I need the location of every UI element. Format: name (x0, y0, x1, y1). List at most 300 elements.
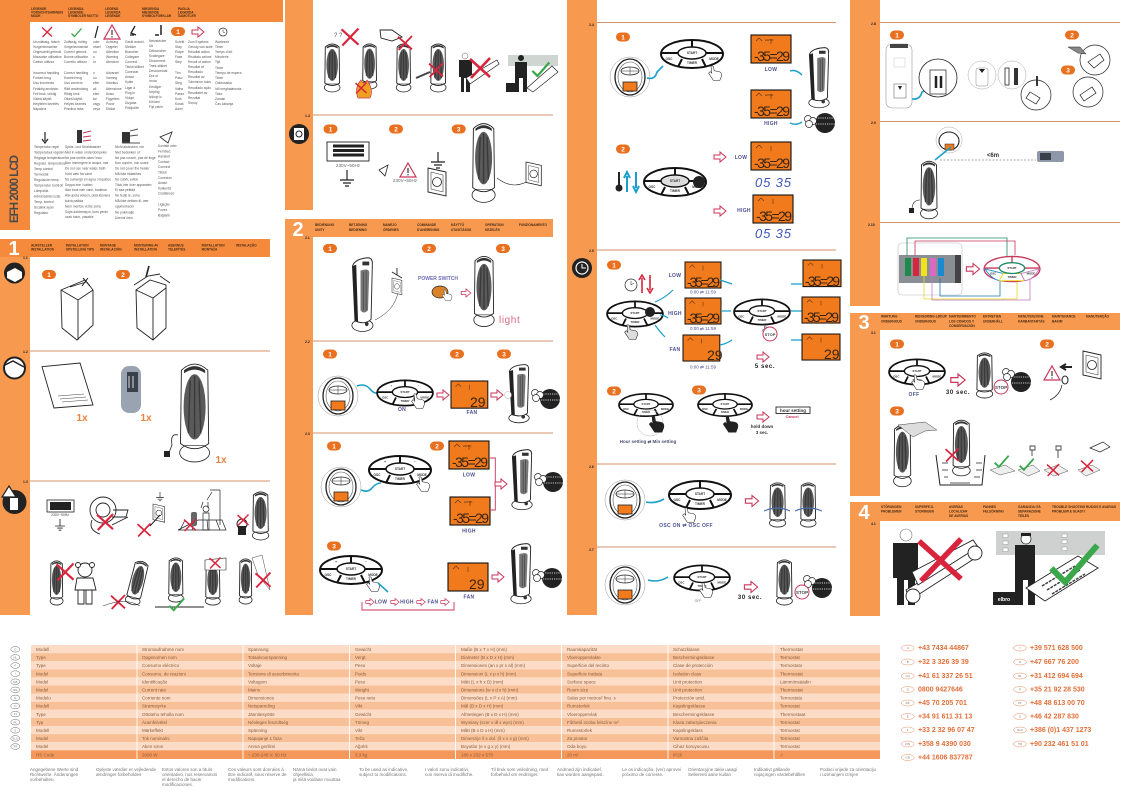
section 2 header: D'ANDRENING (417, 228, 440, 232)
legend text columns: Resultado ação (188, 86, 211, 90)
warnings row 2 (50, 555, 270, 610)
section 4 header: FELSÖKNING (983, 508, 1004, 514)
step 2.5 timer: FAN (670, 347, 681, 353)
safety texts: Réglage température (34, 156, 65, 160)
legend column headings: MIEGENDA (142, 7, 160, 11)
legend text columns: Riktig bruk (64, 92, 80, 96)
footnotes: orientativo, nos reservamos (162, 772, 218, 777)
step 2.5 hour and minute setting: OSC (702, 407, 708, 411)
contents: manual, remote, heater (42, 363, 227, 466)
safety texts: Fernbed. (158, 149, 171, 153)
section 3 header: RENGØRING-LØDUP (915, 314, 948, 318)
section 3 header: KARBANTARTÁS (1018, 318, 1044, 324)
legend text columns: Adım (175, 107, 183, 111)
section 4 header: PROBLEMI E GUASTI (1052, 510, 1085, 514)
section 1 header: OPSTELLING TIPS (66, 248, 94, 252)
step 2.10 button colours: START (1007, 266, 1017, 270)
legend text columns: Gerät anschl. (125, 40, 145, 44)
service phone numbers: +31 412 694 694 (1030, 673, 1083, 680)
country badges: D (14, 647, 17, 651)
legend column headings: LEGENDE (68, 10, 83, 14)
legend text columns: ou (93, 76, 97, 80)
service phone numbers: +41 61 337 26 51 (918, 673, 973, 680)
section 1 header: INSTALLATION (31, 248, 55, 252)
footnotes: modifications. (228, 777, 256, 782)
safety texts: Temperatur regel (34, 145, 59, 149)
step 2.4 adjust (616, 142, 793, 241)
specification table: Strømstyrke (142, 704, 167, 709)
specification table: Spänning (248, 728, 268, 733)
specification table: IP20 (673, 752, 683, 757)
step 2.5 hour and minute setting: MODE (661, 407, 670, 411)
legend text columns (33, 39, 242, 111)
step 2.3 mode cycling: TIMER (346, 577, 357, 581)
specification table: Thermostat (780, 688, 804, 692)
panel: col 3 operation: 2.6 (589, 465, 594, 469)
legend text columns: Conectar (125, 70, 139, 74)
specification table: Stromaufnahme nom (142, 647, 184, 652)
legend text columns: Figyelem (106, 97, 120, 101)
country badges: FI (14, 712, 17, 716)
step 2.5 timer: 1 (612, 262, 616, 270)
legend text columns: Minuterie (215, 55, 229, 59)
legend text columns: ou (93, 50, 97, 54)
step 2.2 fan: + (391, 384, 393, 388)
specification table: Poids (355, 671, 367, 676)
step 2.2 fan: START (400, 390, 410, 394)
panel: col 3 operation: 2.5 (589, 249, 594, 253)
warnings row 3: ? ? (334, 33, 343, 39)
step 2.10 button colours (898, 238, 1040, 300)
specification table: Tensione di assorbimento (248, 671, 300, 676)
specification table: Vloeroppervlakte (567, 655, 601, 660)
step 2.2 fan: 3 (502, 352, 506, 358)
safety texts: Suya daldırmayın, kuru yerde (65, 210, 108, 214)
service phone numbers: A (907, 646, 909, 650)
section 2 header (285, 219, 553, 241)
section 1 header: INSTALLATION (202, 244, 225, 248)
step 2.5 timer: START (630, 311, 640, 315)
legend text columns: Priključite (125, 106, 139, 110)
specification table: ✓ (780, 752, 784, 757)
step 2.3 heat: + (384, 460, 386, 464)
legend text columns: ali (93, 87, 97, 91)
specification table: Ottoteho teholla nom (142, 712, 184, 717)
legend text columns: Unzulässig, falsch (33, 40, 60, 44)
specification table: Isolation class (673, 671, 702, 676)
specification table: Current rate (142, 688, 167, 692)
safety texts: Ne fedje le, soha (115, 194, 140, 198)
specification table: Kapslingsklasse (673, 704, 706, 709)
legend text columns: Wartezeit (215, 40, 229, 44)
panel: legend (0, 0, 283, 230)
step 2.5 timer: START (757, 309, 767, 313)
section 3 header: LOS CIDADOS Y (949, 320, 975, 324)
step 2.5 timer: OSC (738, 314, 744, 318)
legend text columns: Gevolg van actie (188, 45, 213, 49)
safety texts: oppmerksom (115, 204, 134, 208)
service phone numbers: +39 571 628 500 (1030, 645, 1083, 652)
legend column headings: LEGENDA (68, 7, 84, 11)
specification table: Netspænding (248, 704, 275, 709)
step 2.8 batteries: 1 (895, 32, 899, 40)
specification table: Salas por metros² fino. s (567, 696, 617, 701)
legend text columns: veya (93, 107, 100, 111)
legend text columns: Rezultat (188, 96, 200, 100)
footnotes: vorbehalten. (30, 777, 55, 782)
legend text columns: Väärä käyttö (33, 97, 52, 101)
service phone numbers: +44 1606 837787 (918, 754, 973, 762)
safety symbols (42, 129, 172, 143)
safety texts: Temperatuur regelen (34, 150, 65, 154)
step 2.3 heat: − (414, 460, 416, 464)
step 2.3 mode cycling: MODE (368, 573, 378, 577)
legend text columns: Scollegare (149, 54, 165, 58)
legend text columns: Kytke (125, 80, 133, 84)
service phone numbers: +35 21 92 28 530 (1030, 686, 1085, 694)
safety texts: Regulación temp. (34, 178, 60, 182)
legend text columns: oder (93, 40, 100, 44)
legend text columns: Passo (175, 92, 184, 96)
legend text columns: Korrekt brug (64, 76, 82, 80)
section 2 header: FUNZIONAMENTO (519, 223, 547, 227)
step 2.5 hour and minute setting: START (641, 402, 651, 406)
service phone numbers: +45 70 205 701 (918, 700, 967, 707)
panel: section 3 cleaning: 3.1 (871, 331, 876, 335)
step 2.2 fan: − (418, 384, 420, 388)
country badges: SLO (12, 736, 19, 740)
panel: section 1 installation (0, 256, 270, 615)
step 2.4 temperature: TIMER (687, 61, 698, 65)
section 4 header: TEILES (1018, 514, 1029, 518)
step 2.2 fan: 1 (328, 352, 332, 358)
service phone numbers: NL (1018, 674, 1022, 678)
legend text columns: Dugása (125, 101, 137, 105)
section 1 header: MONTERING AV (134, 244, 159, 248)
specification table: Vergt (355, 655, 366, 660)
step 2.2 fan: ON (398, 407, 406, 413)
specification table: Kapslingsklass (673, 728, 704, 733)
legend text columns: Feil bruk, uriktig (33, 92, 56, 96)
specification table: Type (36, 712, 46, 717)
country badges: IRL (13, 688, 18, 692)
legend text columns: Tidur (215, 92, 223, 96)
footnotes: To be used as indicative, (359, 767, 408, 772)
legend text columns: Tilslut stikket (125, 65, 144, 69)
step 2.2 fan: 29 (470, 394, 486, 410)
legend text columns: Collegare (125, 55, 139, 59)
section 3 header: BAKIM (1052, 320, 1063, 324)
specification table: Modell (36, 704, 49, 709)
legend text columns: Vaihe (175, 87, 183, 91)
step 2.6 oscillation: OSC (674, 498, 681, 502)
step 2.5 hour and minute setting: START (720, 402, 730, 406)
step 2.6 oscillation: MODE (717, 498, 727, 502)
specification table: Termostat (780, 655, 801, 660)
footnotes: kan worden aangepast. (557, 772, 604, 777)
footnotes: Andmed zijn indicatief, (557, 767, 602, 772)
legend column headings: LEGENDA (105, 10, 121, 14)
legend text columns: Fase (175, 55, 182, 59)
specification table: Model (36, 679, 48, 684)
legend text columns: Kihúzni (149, 100, 160, 104)
section 4 header: RUIDOS E AVARIAS (1086, 505, 1116, 509)
legend text columns: Tiempo de espera (215, 71, 242, 75)
service phone numbers: D (907, 688, 910, 692)
safety texts: Anslut (158, 181, 167, 185)
legend text columns: Résultat action (188, 50, 210, 54)
step 2.4 temperature: OSC (666, 57, 673, 61)
specification table: Beschermingsklasse (673, 712, 715, 717)
country badges: N (14, 704, 16, 708)
legend text columns: Cattivo utilizzo (33, 60, 54, 64)
specification table: Weight (355, 688, 370, 692)
step 2.4 temperature (610, 32, 835, 133)
legend text columns: Etape (175, 50, 184, 54)
legend text columns: eller (93, 92, 100, 96)
step 2.4 adjust: 2 (621, 146, 625, 154)
specification table: Type (36, 663, 46, 668)
legend text columns: Toiminnon tulos (188, 80, 211, 84)
step 2.4 temperature: 1 (621, 34, 625, 42)
section 1 header: MONTAŽA (202, 246, 218, 252)
step 2.5 timer (607, 260, 841, 370)
legend text columns: Timer (215, 76, 224, 80)
section 3 header: MANUTENZIONE (1018, 314, 1044, 318)
warnings row 1 (47, 490, 269, 540)
section 2 header: MANEJO (383, 223, 397, 227)
step 2.4 temperature: -35=29 (754, 103, 790, 119)
step 2.6 oscillation (605, 480, 822, 529)
legend text columns: tai (93, 97, 97, 101)
footnotes: Orientacyjne takie uwagi (688, 767, 737, 772)
step 2.5 hour and minute setting: 3 (697, 388, 701, 394)
legend text columns: Paso (175, 76, 183, 80)
section 2 header: COMMANDE (417, 223, 436, 227)
safety texts: Ei saa peittää (115, 188, 135, 192)
specification table: Boyutlar (e x g x y) (mm) (461, 744, 511, 749)
specification table: Model (36, 688, 48, 692)
section 4 header: GARANZIA ITÁ (1018, 504, 1041, 509)
specification table: Oda boyu (567, 744, 587, 749)
step 2.4 adjust: OSC (649, 185, 656, 189)
step 3.1 switch off: OFF (909, 392, 919, 398)
step 2.3 heat: MODE (417, 473, 427, 477)
step 2.5 timer: STOP (765, 332, 776, 337)
service phone numbers: S (1019, 714, 1021, 718)
safety texts: Doppa inte i vatten (65, 183, 93, 187)
panel: section 1 installation: 1.2 (23, 350, 28, 354)
step 2.3 mode cycling: FAN (428, 600, 439, 606)
step 2.5 timer: -35=29 (804, 309, 839, 325)
step 2.3 mode cycling: 29 (469, 576, 485, 592)
section 3 header: WARTUNG (881, 314, 898, 318)
legend text columns: Mauvaise utilisation (33, 55, 62, 59)
section 1 header: INSTALACIÓN (100, 246, 122, 252)
safety texts: Tilslut (158, 170, 167, 174)
step 2.4 adjust: 05 35 (755, 175, 792, 190)
footnotes: Podaci vrijede za orientaciju (820, 767, 876, 772)
step 3.1 cleaning (890, 406, 1110, 487)
section 4 header (850, 502, 1120, 524)
step 2.6 oscillation: OSC ON ⇄ OSC OFF (659, 522, 713, 529)
step 2.5 timer: 29 (824, 346, 840, 362)
specification table: Peso neto (355, 696, 376, 701)
service phone numbers: F (907, 728, 909, 732)
legend text columns: Uso incorrecto (33, 81, 54, 85)
specification table: Lämmönsäädin (780, 679, 811, 684)
step 2.3 mode cycling: + (335, 560, 337, 564)
section 2 header: KÄYTTÖ (451, 222, 465, 227)
legend text columns: Dikkat (106, 107, 115, 111)
warnings row 1: 230V~50Hz (51, 513, 69, 517)
footnotes: Til bruk som veiledning, med (491, 767, 548, 772)
step 3.1 switch off: 30 sec. (946, 390, 970, 396)
legend column headings: LEGENDA (178, 10, 194, 14)
specification table: Thermostat (780, 647, 803, 652)
legend text columns: Resultat af (188, 65, 204, 69)
legend text columns: Krok (175, 97, 182, 101)
footnotes: Le os indicação, (ver) aprovei (622, 767, 681, 772)
legend text columns: Resultat av (188, 75, 205, 79)
specification table: Type (36, 655, 46, 660)
step 2.4 temperature: START (687, 51, 697, 55)
section 3 header: MANTENIMIENTO (949, 314, 976, 318)
safety texts: Conexión (158, 176, 172, 180)
specification table: Dimensiones (248, 696, 275, 701)
legend text columns: Helyes kezelés (64, 102, 87, 106)
panel: col 4 remote control: 2.9 (871, 121, 876, 125)
service phone numbers: B (907, 660, 909, 664)
section 2 header: KEZELÉS (485, 227, 500, 232)
section 3 header: 3 (858, 312, 870, 334)
specification table: Gewicht (355, 647, 371, 652)
specification table: Termostat (780, 704, 801, 709)
service phone numbers: +47 667 76 200 (1030, 659, 1079, 666)
section 3 header: ONDERHOUD (881, 320, 903, 324)
specification table: Vikt (355, 704, 363, 709)
step 2.7 off: 30 sec. (738, 595, 762, 601)
step 2.5 timer: 0:00 ⇄ 11:59 (690, 364, 716, 370)
legend text columns: Tijd (215, 60, 220, 64)
specification table: Termostat (780, 720, 801, 725)
specification table: Napajanje 1 faza (248, 736, 282, 741)
legend column headings (31, 7, 197, 18)
specification table: Dimensiones (an x pr x al) (mm) (461, 663, 526, 668)
service phone numbers (901, 645, 1091, 762)
country badges: GB (13, 680, 17, 684)
step 2.10 button colours: OSC (990, 271, 996, 275)
specification table: Mått (L x h x D) (mm) (461, 678, 504, 684)
legend column headings: MIEGENDE (142, 10, 159, 14)
icon: clock (572, 258, 592, 278)
step 2.5 timer: MODE (777, 314, 786, 318)
legend text columns: Stekker (125, 45, 137, 49)
section 3 header: ONDERHOUD (915, 320, 937, 324)
specification table: Tok nominalni (142, 736, 170, 741)
specification table: Áramfelvétel (142, 719, 167, 725)
step 2.1 power on: 3 (501, 246, 505, 253)
specification table: Cihaz koruyucusu (673, 744, 709, 749)
step 2.10 button colours: TIMER (1008, 275, 1017, 279)
legend icon row: 1 (176, 29, 180, 36)
service phone numbers: 0800 9427646 (918, 686, 963, 694)
step 2.5 hour and minute setting: TIMER (721, 410, 729, 414)
step 3.1 switch off: 1 (895, 342, 899, 348)
section 4 header: TROUBLE SHOOTING (1052, 505, 1086, 509)
legend text columns: Vorgehensweise (33, 45, 57, 49)
step 2.7 off: MODE (717, 580, 726, 584)
safety texts: Aansluit (158, 155, 170, 159)
step 2.4 temperature: HIGH (764, 121, 778, 127)
legend column headings: SAMOTLER (178, 14, 197, 18)
step 2.3 mode cycling: FAN (464, 594, 475, 600)
specification table: Spannung (248, 647, 269, 652)
safety texts: Må ikke tildækkes (115, 172, 142, 176)
panel: section 3 cleaning (850, 330, 1110, 496)
panel: section 2 operation: 2.1 (305, 236, 310, 240)
safety texts: Ne pas mettre dans l'eau (65, 156, 102, 160)
legend text columns: Helytelen kezelés (33, 102, 59, 106)
service phone numbers: E (907, 714, 909, 718)
panel: col 4 remote control (850, 0, 1120, 306)
specification table: Peso (355, 663, 366, 668)
step 1 and 2 unpacking: 2 (121, 272, 125, 279)
panel: col 3 operation: 2.4 (589, 23, 594, 27)
footnotes: i uzimanjem izmjen (820, 772, 859, 777)
step 3.1 unplug (1040, 340, 1101, 400)
step 3.1 switch off: STOP (995, 385, 1007, 390)
call service (993, 531, 1105, 605)
specification table: Akım sınırı (142, 744, 164, 749)
country badges: F (14, 664, 16, 668)
safety texts: Bağlantı (158, 213, 170, 217)
section 2 header: 2 (292, 219, 304, 241)
footnotes: Ces valeurs sont données à (228, 767, 284, 772)
specification table: Clase de protección (673, 663, 713, 668)
service phone numbers: P (1019, 688, 1021, 692)
step 2.9 range: <6m (987, 153, 999, 159)
section 1 header: AUFSTELLEN (31, 244, 53, 248)
legend text columns: eller (93, 81, 100, 85)
specification table: Dimensions (w x d x h) (mm) (461, 688, 519, 692)
section 4 header: STORINGEN (915, 510, 935, 514)
specification table: Afmetingen (B x D x H) (mm) (461, 712, 519, 717)
safety texts: Ikke bruk nær vann, badekar (65, 188, 108, 192)
specification table: 20 m² (567, 752, 579, 757)
step 2.2 fan: OSC (382, 395, 388, 399)
legend text columns: Čas čakanja (215, 101, 233, 106)
step 2.3 heat: -35=29 (452, 454, 488, 470)
legend text columns: o (93, 55, 95, 59)
step 2.2 fan: MODE (420, 395, 429, 399)
section 2 header: UTASÍTÁSOK (451, 227, 472, 232)
section 4 header: STÖRUNGEN (881, 504, 902, 509)
step 2.8 batteries (886, 30, 1110, 110)
specification table: Superficie del recinto (567, 663, 610, 668)
specification table: HS Code (36, 752, 55, 757)
specification table: Peso (355, 679, 366, 684)
safety texts: Csatlakozó (158, 192, 174, 196)
legend text columns: Forkert brug (33, 76, 51, 80)
step 2.4 adjust: START (670, 179, 680, 183)
call service: elbro (998, 597, 1010, 603)
legend text columns: Achtung (106, 40, 118, 44)
footnotes: I valori sono indicativi, (425, 767, 469, 772)
safety texts: Ligação (158, 203, 170, 207)
safety texts: uzak tutun, yasaktır (65, 215, 94, 219)
safety texts: Ne pas couvrir, pas de linge (115, 156, 156, 160)
